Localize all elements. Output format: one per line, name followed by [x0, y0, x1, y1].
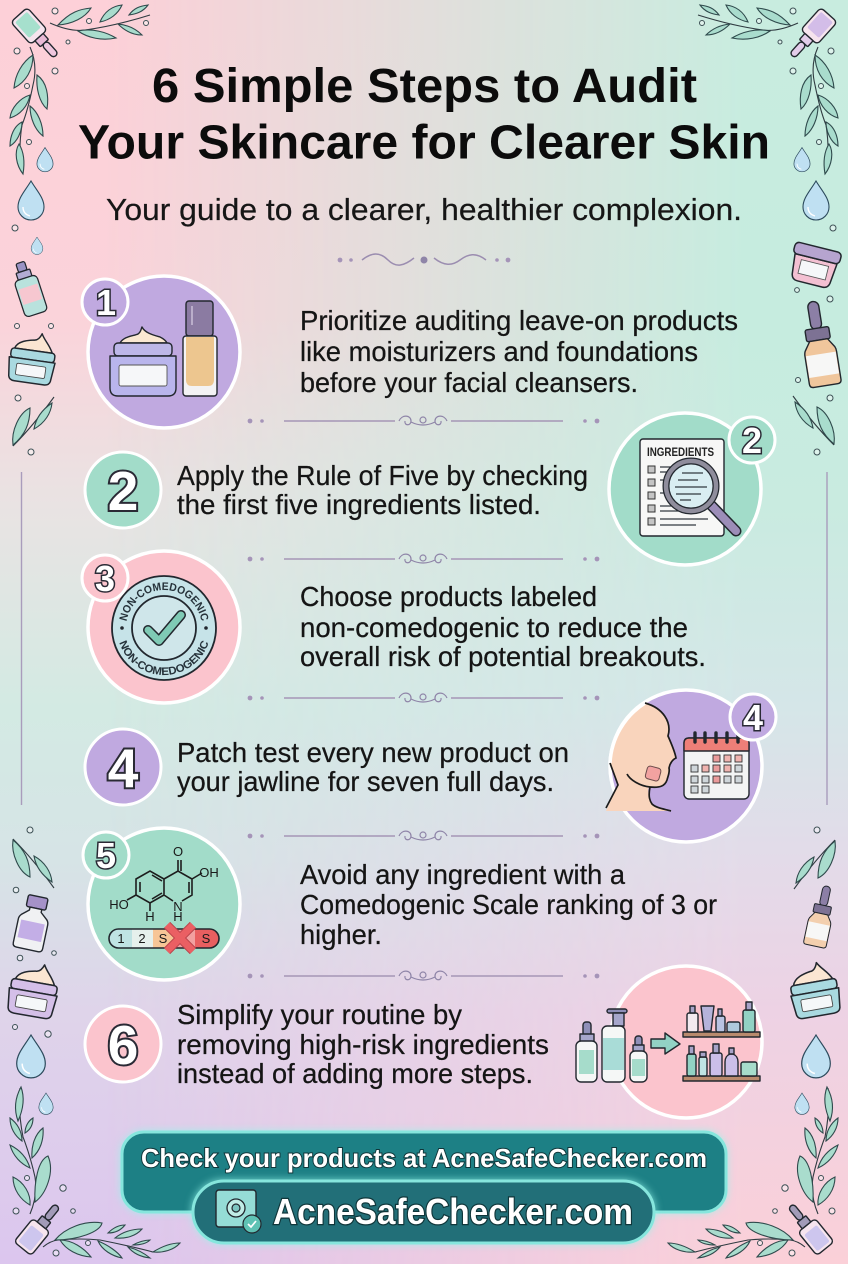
website pill	[193, 1181, 654, 1243]
cream jar	[110, 327, 176, 396]
subtitle: Your guide to a clearer, healthier complexion.	[106, 192, 742, 227]
step 2 text: Apply the Rule of Five by checking	[177, 460, 588, 491]
arrow	[651, 1033, 680, 1054]
divider	[248, 831, 599, 840]
molecule	[109, 844, 219, 924]
website address: AcneSafeChecker.com	[273, 1191, 633, 1232]
title: 6 Simple Steps to Audit	[152, 60, 697, 113]
step 2 text	[177, 460, 588, 520]
step 2 number: 2	[108, 460, 138, 522]
divider	[248, 693, 599, 702]
step 3 text: non-comedogenic to reduce the	[300, 612, 688, 643]
step 3 text: overall risk of potential breakouts.	[300, 641, 706, 672]
comedogenic scale	[108, 925, 220, 951]
step 6 text: removing high-risk ingredients	[177, 1029, 549, 1060]
molecule: H	[145, 909, 155, 924]
ingredients sheet	[640, 439, 724, 536]
seal: NON-COMEDOGENIC	[119, 582, 208, 621]
step 4 text: your jawline for seven full days.	[177, 766, 554, 797]
top ornament divider	[338, 254, 510, 265]
three bottles	[576, 1009, 647, 1082]
foundation bottle	[183, 301, 217, 396]
step 6 text: instead of adding more steps.	[177, 1058, 533, 1089]
decorative corner: top left	[10, 5, 150, 174]
comedogenic scale: S	[159, 931, 168, 946]
step 4 number: 4	[108, 737, 139, 799]
step 3 illustration: non-comedogenic seal	[80, 549, 242, 705]
step 5 number badge: 5	[96, 835, 116, 876]
molecule: OH	[199, 865, 219, 880]
title	[78, 60, 770, 170]
step 5 number badge	[83, 832, 129, 878]
molecule: H	[173, 909, 183, 924]
step 1 number badge: 1	[96, 282, 116, 323]
molecule: O	[173, 844, 183, 859]
magnifying glass	[666, 461, 736, 531]
divider	[248, 971, 599, 980]
cta heading: Check your products at AcneSafeChecker.com	[141, 1143, 707, 1173]
side rule lines	[22, 472, 827, 805]
seal	[111, 575, 217, 681]
comedogenic scale: 1	[117, 931, 125, 946]
step 2 number badge	[729, 417, 775, 463]
step 2 illustration: ingredients list and magnifier	[609, 413, 775, 565]
icons: left side water drops	[17, 148, 53, 1114]
calendar	[684, 733, 749, 799]
step 6 number	[85, 1006, 161, 1082]
icon: safe with check	[216, 1190, 261, 1233]
step 2 number	[85, 452, 161, 528]
step 1 number badge	[82, 279, 128, 325]
step 1 text	[300, 305, 738, 398]
step 1 text: Prioritize auditing leave-on products	[300, 305, 738, 336]
step 5 text: higher.	[300, 919, 382, 950]
step 3 number badge: 3	[95, 558, 115, 599]
molecule: N	[173, 899, 183, 914]
icons: right side water drops	[794, 148, 830, 1114]
step 4 text	[177, 737, 569, 797]
step 2 text: the first five ingredients listed.	[177, 489, 541, 520]
step 2 number badge: 2	[742, 420, 762, 461]
step 6 text: Simplify your routine by	[177, 999, 462, 1030]
step 4 illustration: face patch and calendar	[606, 690, 776, 842]
icons: right side cosmetics	[786, 225, 843, 1020]
title: Your Skincare for Clearer Skin	[78, 116, 770, 170]
shelves with products	[683, 1002, 760, 1081]
step 1 text: like moisturizers and foundations	[300, 336, 698, 367]
seal: NON-COMEDOGENIC	[120, 640, 208, 676]
molecule: HO	[109, 897, 129, 912]
step 5 text: Comedogenic Scale ranking of 3 or	[300, 889, 717, 920]
face profile	[606, 703, 676, 811]
step 6 illustration: bottles to organised shelves	[576, 966, 762, 1118]
step 6 text	[177, 999, 549, 1089]
decorative corner: bottom left	[10, 1087, 180, 1258]
step 4 number badge: 4	[743, 697, 763, 738]
divider	[248, 554, 599, 563]
step 4 number	[85, 729, 161, 805]
step 5 text	[300, 859, 717, 950]
step 3 text	[300, 581, 706, 672]
step 5 text: Avoid any ingredient with a	[300, 859, 626, 890]
step 1 text: before your facial cleansers.	[300, 367, 638, 398]
step 6 number: 6	[108, 1014, 138, 1076]
icons: left side cosmetics	[5, 225, 62, 1037]
divider	[248, 416, 599, 425]
step 4 number badge	[730, 694, 776, 740]
decorative corner: top right	[698, 5, 838, 174]
step 1 illustration: jar and foundation	[82, 276, 240, 428]
call to action banner	[122, 1132, 726, 1243]
decorative corner: bottom right	[668, 1087, 838, 1258]
step 5 illustration: molecule and comedogenic scale	[83, 828, 240, 980]
comedogenic scale: 2	[138, 931, 146, 946]
comedogenic scale: S	[202, 931, 211, 946]
step 3 text: Choose products labeled	[300, 581, 597, 612]
ingredients sheet: INGREDIENTS	[647, 445, 714, 459]
step 3 number badge	[82, 555, 128, 601]
step 4 text: Patch test every new product on	[177, 737, 569, 768]
